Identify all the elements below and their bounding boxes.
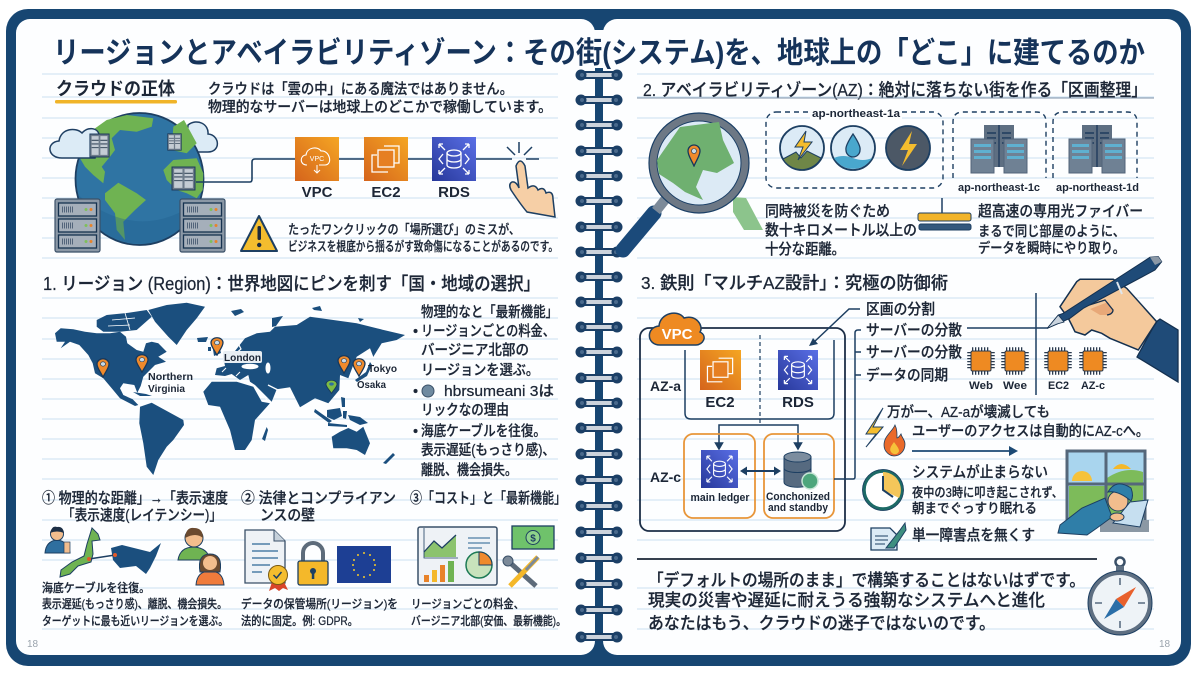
icons: servers on globe — [90, 134, 195, 190]
icon: dashboard — [418, 527, 497, 585]
icon: database standby — [784, 452, 818, 489]
heading: factor 2 — [241, 490, 396, 524]
panel: region — [43, 274, 558, 479]
chip labels: Web — [969, 380, 993, 392]
panel: cloud reality — [50, 79, 558, 254]
conclusion text — [648, 570, 1085, 633]
icon: lightning — [866, 408, 883, 447]
text: system keeps running — [912, 463, 1063, 516]
icon: servers 1c — [971, 125, 1027, 173]
list labels — [866, 301, 962, 384]
warning text: たったワンクリックの「場所選び」のミスが、 — [288, 222, 520, 237]
label: VPC: VPC — [302, 184, 333, 201]
intro text: 物理的なサーバーは地球上のどこかで稼働しています。 — [208, 99, 552, 116]
intro text — [208, 80, 552, 116]
panel: three factors — [42, 489, 566, 628]
conclusion text: 現実の災害や遅延に耐えうる強靭なシステムへと進化 — [648, 591, 1045, 610]
icon: servers 1d — [1069, 125, 1125, 173]
text: region bullet list: • — [413, 384, 418, 400]
icon: clock — [862, 470, 904, 510]
label: standby: Conchonized — [766, 491, 830, 503]
icon: warning triangle — [241, 216, 277, 251]
text: region bullet list: リックなの理由 — [421, 402, 509, 419]
text: fiber: 超高速の専用光ファイバー — [978, 203, 1143, 220]
text: factor 1 description: 表示遅延(もっさり感)、離脱、機会損失。 — [42, 597, 227, 611]
icon: globe — [76, 113, 204, 245]
text: fiber — [978, 203, 1143, 256]
icon: pointing hand — [507, 142, 555, 217]
list labels: サーバーの分散 — [866, 344, 962, 361]
icon: RDS main — [701, 450, 738, 488]
conclusion text: 「デフォルトの場所のまま」で構築することはないはずです。 — [648, 570, 1085, 590]
text: region bullet list: 海底ケーブルを往復。 — [421, 422, 546, 440]
text: region bullet list: • — [413, 424, 418, 440]
map labels: London — [224, 353, 261, 364]
map pins — [97, 338, 365, 393]
dashed zone: ap-northeast-1d — [1053, 112, 1137, 178]
label: 1d: ap-northeast-1d — [1056, 182, 1139, 194]
label: 1c: ap-northeast-1c — [958, 182, 1040, 194]
icon: RDS in AZ-a — [778, 350, 818, 390]
icon: VPC — [295, 137, 339, 181]
label: AZ-a: AZ-a — [650, 378, 681, 394]
icon: server rack right — [180, 199, 225, 252]
text: factor 1 description: 海底ケーブルを往復。 — [42, 581, 150, 595]
text: distance: 十分な距離。 — [765, 241, 845, 258]
right page — [603, 19, 1181, 655]
dashed zone: ap-northeast-1c — [953, 112, 1046, 178]
world map — [55, 303, 405, 475]
intro text: クラウドは「雲の中」にある魔法ではありません。 — [208, 80, 513, 98]
heading: availability zone: 2. アベイラビリティゾーン(AZ)：絶対に落ちない街を作る「区画整理」 — [643, 80, 1147, 100]
label: standby — [766, 491, 830, 514]
list labels: サーバーの分散 — [866, 322, 962, 339]
icon: hand with pen — [1047, 257, 1178, 382]
icon: latency people and map — [45, 527, 224, 585]
left page — [16, 19, 595, 655]
text: region bullet list: 物理的なと「最新機能」 — [421, 304, 558, 321]
icon: server rack left — [55, 199, 100, 252]
chip labels: Wee — [1003, 380, 1027, 392]
icon: flame — [884, 425, 905, 456]
map labels — [148, 351, 397, 395]
label: EC2 in AZ-a: EC2 — [705, 394, 735, 411]
icon: EC2 — [364, 137, 408, 181]
icon: EU flag — [337, 546, 391, 583]
text: fiber: まるで同じ部屋のように、 — [978, 223, 1125, 239]
page number right: 18 — [1159, 639, 1171, 650]
text: system keeps running: 夜中の3時に叩き起こされず、 — [912, 485, 1063, 500]
icon: document with badge — [245, 530, 288, 591]
connector arrows to AZ-c — [716, 425, 802, 449]
text: factor 3 description: バージニア北部(安価、最新機能)。 — [411, 614, 566, 628]
dashed zone: ap-northeast-1a — [766, 106, 943, 188]
label: AZ-c: AZ-c — [650, 469, 681, 485]
list labels: 区画の分割 — [866, 301, 935, 318]
AZ-a frame — [685, 340, 834, 419]
warning text — [288, 222, 558, 254]
text: factor 1 description — [42, 581, 228, 628]
text: fiber: データを瞬時にやり取り。 — [978, 240, 1125, 256]
text: region bullet list: リージョンを選ぶ。 — [421, 362, 539, 379]
map coast details — [108, 313, 278, 403]
text: region bullet list: • — [413, 324, 418, 340]
icon: power outage — [886, 126, 930, 170]
heading: factor 1: 「表示速度(レイテンシー)」 — [62, 506, 222, 524]
text: factor 3 description: リージョンごとの料金、 — [411, 597, 524, 611]
pointer line and divider — [967, 293, 1048, 395]
text: region bullet list: 表示遅延(もっさり感)、 — [421, 441, 555, 459]
text: region bullet list: hbrsumeani 3は — [444, 384, 554, 400]
icon: wrench and screwdriver — [503, 556, 538, 586]
icon: magnifier over map — [623, 113, 763, 250]
text: single point of failure: 単一障害点を無くす — [912, 527, 1035, 544]
icon: VPC cloud — [649, 313, 704, 345]
dashed zone: ap-northeast-1a: ap-northeast-1a — [812, 108, 901, 120]
arrow: failover — [912, 446, 1018, 456]
text: factor 2 description — [241, 597, 398, 628]
heading: factor 3: ③「コスト」と「最新機能」 — [410, 490, 566, 507]
icon: VPC cloud: VPC — [662, 326, 693, 343]
heading: cloud reality: クラウドの正体 — [56, 79, 175, 99]
AZ-c box: main — [684, 434, 755, 518]
text: region bullet list: 離脱、機会損失。 — [421, 462, 517, 479]
icon: earthquake — [780, 126, 824, 170]
AZ divider — [759, 335, 761, 425]
panel: availability zone — [623, 80, 1154, 258]
text: system keeps running: 朝までぐっすり眠れる — [912, 501, 1037, 516]
chips — [969, 349, 1105, 373]
heading: factor 2: ンスの壁 — [260, 507, 315, 524]
text: AZ failure — [887, 403, 1149, 440]
spiral binding — [576, 70, 622, 642]
bracket line — [834, 330, 861, 479]
label: main ledger: main ledger — [690, 492, 750, 504]
text: factor 2 description: 法的に固定。例: GDPR。 — [241, 614, 358, 628]
icon: flood — [831, 126, 875, 170]
connection line — [196, 159, 512, 182]
heading: factor 1 — [42, 489, 228, 524]
text: region bullet list — [413, 304, 558, 479]
AZ-c box: standby — [764, 434, 834, 518]
conclusion text: あなたはもう、クラウドの迷子ではないのです。 — [648, 614, 995, 633]
label: standby: and standby — [768, 502, 829, 514]
heading: region: 1. リージョン (Region)：世界地図にピンを刺す「国・地域の選択」 — [43, 274, 540, 294]
icon: RDS — [432, 137, 476, 181]
text: distance — [765, 203, 917, 258]
icon: EC2 in AZ-a — [700, 350, 741, 390]
map labels: Northern — [148, 372, 193, 383]
map labels: Tokyo — [368, 364, 397, 375]
label: EC2: EC2 — [371, 184, 401, 201]
icon: money — [512, 526, 554, 549]
map labels: Virginia — [148, 384, 185, 395]
icon: document and wrench — [871, 523, 906, 550]
heading: factor 2: ② 法律とコンプライアン — [241, 490, 396, 507]
text: region bullet list: リージョンごとの料金、 — [421, 322, 555, 340]
icon: window and sleeping person — [1058, 451, 1149, 535]
page number left: 18 — [27, 639, 39, 650]
text: distance: 同時被災を防ぐため — [765, 203, 890, 220]
icon: VPC: VPC — [310, 156, 324, 163]
list labels: データの同期 — [866, 366, 948, 384]
text: factor 1 description: ターゲットに最も近いリージョンを選ぶ。 — [42, 614, 228, 628]
arrow: partition callout — [809, 309, 860, 346]
label: RDS in AZ-a: RDS — [782, 394, 814, 411]
icon: compass — [1088, 558, 1152, 635]
chip labels: AZ-c — [1081, 380, 1105, 392]
text: distance: 数十キロメートル以上の — [765, 222, 917, 239]
text: factor 3 description — [411, 597, 566, 628]
icon: right cloud — [186, 122, 217, 152]
map labels: Osaka — [357, 380, 386, 391]
text: region bullet list: バージニア北部の — [421, 342, 529, 359]
VPC frame — [640, 328, 845, 531]
chip labels — [969, 380, 1105, 392]
icon: padlock — [298, 543, 328, 585]
text: factor 2 description: データの保管場所(リージョン)を — [241, 597, 398, 611]
icon: left cloud — [50, 129, 99, 158]
panel: multi-AZ — [640, 257, 1178, 550]
panel: conclusion — [637, 558, 1152, 635]
arrow: sync — [740, 466, 781, 476]
warning text: ビジネスを根底から揺るがす致命傷になることがあるのです。 — [288, 239, 558, 254]
heading: multi-AZ: 3. 鉄則「マルチAZ設計」：究極の防御術 — [641, 273, 948, 293]
heading: factor 1: ① 物理的な距離」→「表示速度 — [42, 489, 228, 507]
icon: money: $ — [530, 534, 536, 544]
label: RDS: RDS — [438, 184, 470, 201]
text: AZ failure: 万が一、AZ-aが壊滅しても — [887, 403, 1050, 421]
icon: fiber cable — [918, 198, 971, 230]
text: AZ failure: ユーザーのアクセスは自動的にAZ-cへ。 — [912, 423, 1149, 440]
text: system keeps running: システムが止まらない — [912, 463, 1048, 481]
chip labels: EC2 — [1048, 380, 1069, 392]
